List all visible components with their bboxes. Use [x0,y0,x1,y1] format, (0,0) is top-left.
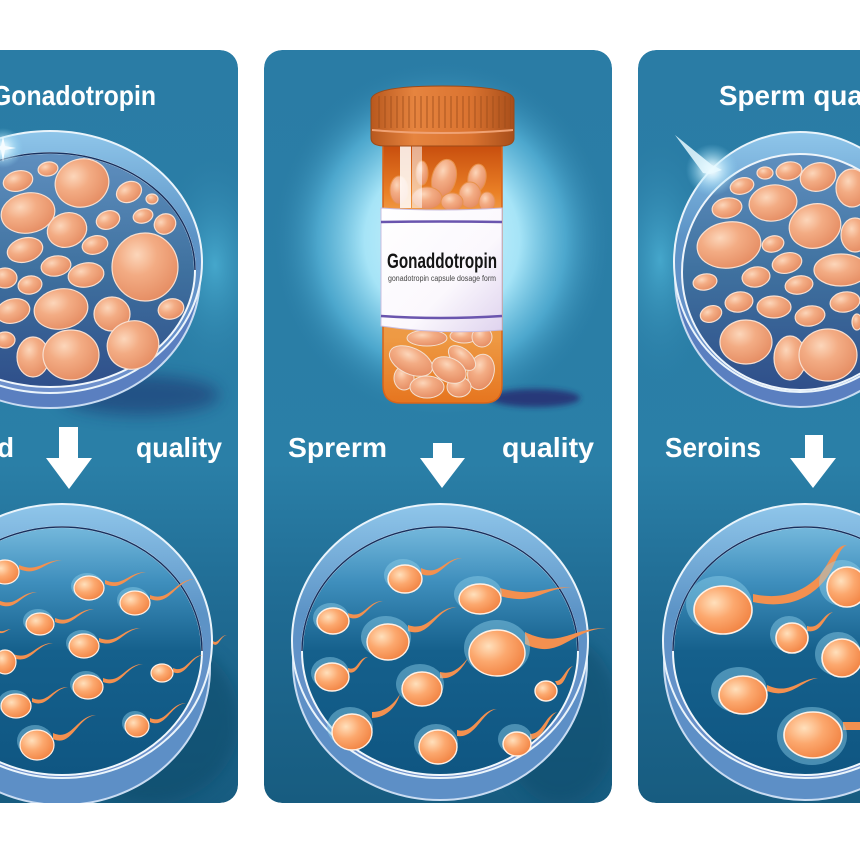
sperm heads [694,567,860,758]
medicine bottle [371,86,514,403]
label: Sperm: Sprerm [288,432,387,463]
arrow down [420,443,465,488]
label text: Gonaddotropin [387,250,497,273]
petri dish with sperm, left [0,504,227,805]
bottle cap [371,86,514,146]
sperm head halos [0,573,149,757]
sperm tails [0,560,227,741]
label: quality: quality [136,432,222,463]
bottle reflection [400,146,422,208]
sperm tails [753,545,860,730]
petri dish with sperm, right [663,504,860,800]
pills upper [390,157,495,212]
sperm heads [315,565,557,764]
sperm head halos [686,560,860,765]
petri dish with sperm, middle [292,504,606,800]
cells [0,153,186,380]
label: quality: quality [502,432,594,463]
bottle shadow [490,389,580,407]
arrow down [790,435,836,488]
panel: middle [264,50,620,805]
petri dish with round cells, left [0,131,202,408]
bottle glow [292,82,592,384]
petri dish with round cells, right [674,132,860,407]
arrow down [46,427,92,489]
panel: right [638,50,860,803]
cells [692,159,860,381]
bottle label [381,208,502,332]
label: Seroins: Seroins [665,432,761,463]
sparkle [0,130,20,166]
pills lower [388,330,495,398]
sperm tails [348,558,606,740]
sperm head halos [311,559,532,762]
sperm heads [0,560,173,760]
panel: left [0,50,238,803]
sparkle [675,135,738,196]
label fine print: gonadotropin capsule dosage form [388,274,496,283]
